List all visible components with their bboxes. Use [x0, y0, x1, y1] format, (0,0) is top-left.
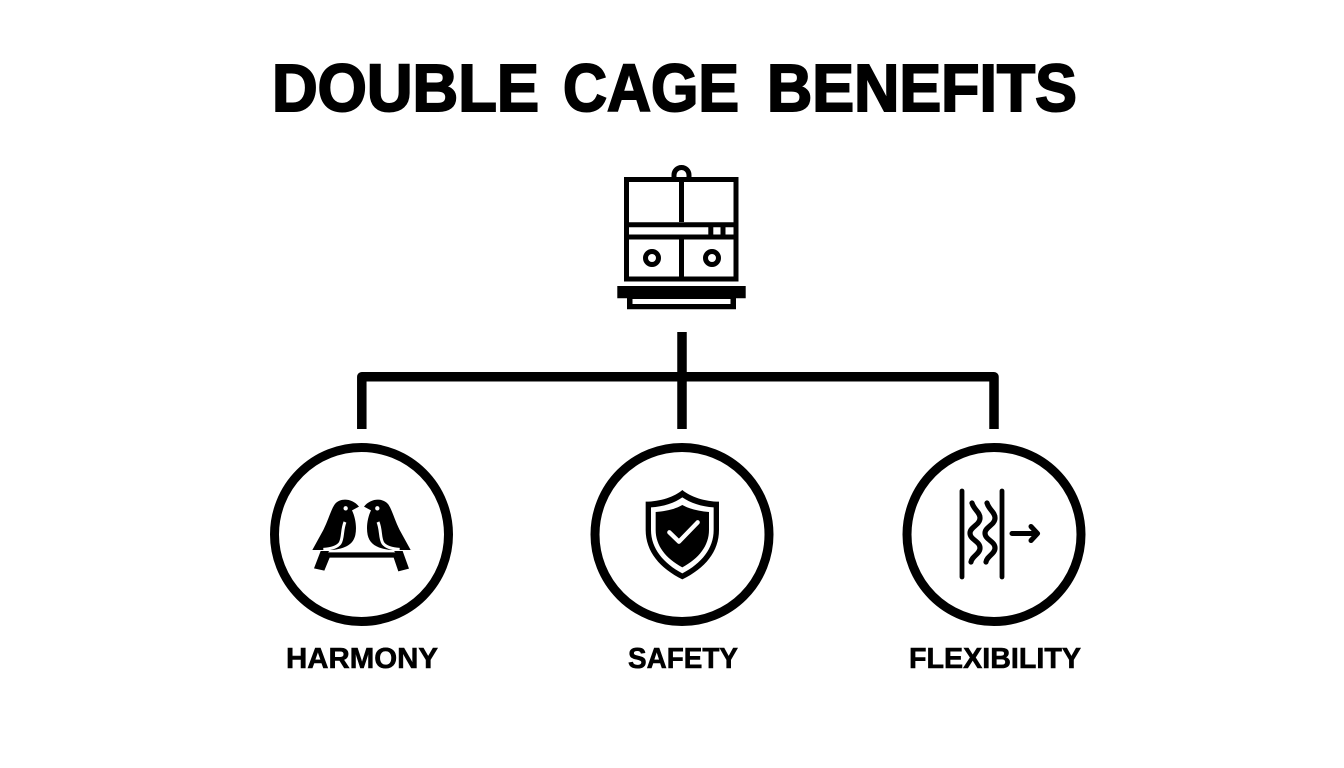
title — [272, 51, 1077, 126]
safety label: SAFETY — [628, 643, 738, 675]
harmony label: HARMONY — [286, 643, 438, 675]
harmony circle — [274, 448, 448, 622]
left cage door latch — [646, 252, 658, 264]
icon: shield with check — [646, 490, 719, 579]
right cage door latch — [706, 252, 718, 264]
flexibility circle — [907, 448, 1081, 622]
panel: safety — [595, 448, 769, 675]
left bird — [312, 500, 359, 550]
panel: harmony — [274, 448, 448, 675]
cage frame — [626, 180, 736, 279]
cage dividers — [626, 180, 736, 280]
cage base — [617, 286, 746, 309]
tree connector — [362, 332, 994, 429]
cage hanging loop — [674, 168, 689, 178]
title: BENEFITS — [767, 51, 1077, 126]
title: CAGE — [563, 51, 739, 126]
safety circle — [595, 448, 769, 622]
icon: wavy partition with arrow — [962, 491, 1038, 577]
flexibility label: FLEXIBILITY — [909, 643, 1081, 675]
icon: two birds on perch — [312, 500, 411, 571]
right bird — [364, 500, 411, 550]
perch — [314, 551, 409, 571]
icon: double cage — [617, 168, 746, 309]
panel: flexibility — [907, 448, 1081, 675]
title: DOUBLE — [272, 51, 539, 126]
